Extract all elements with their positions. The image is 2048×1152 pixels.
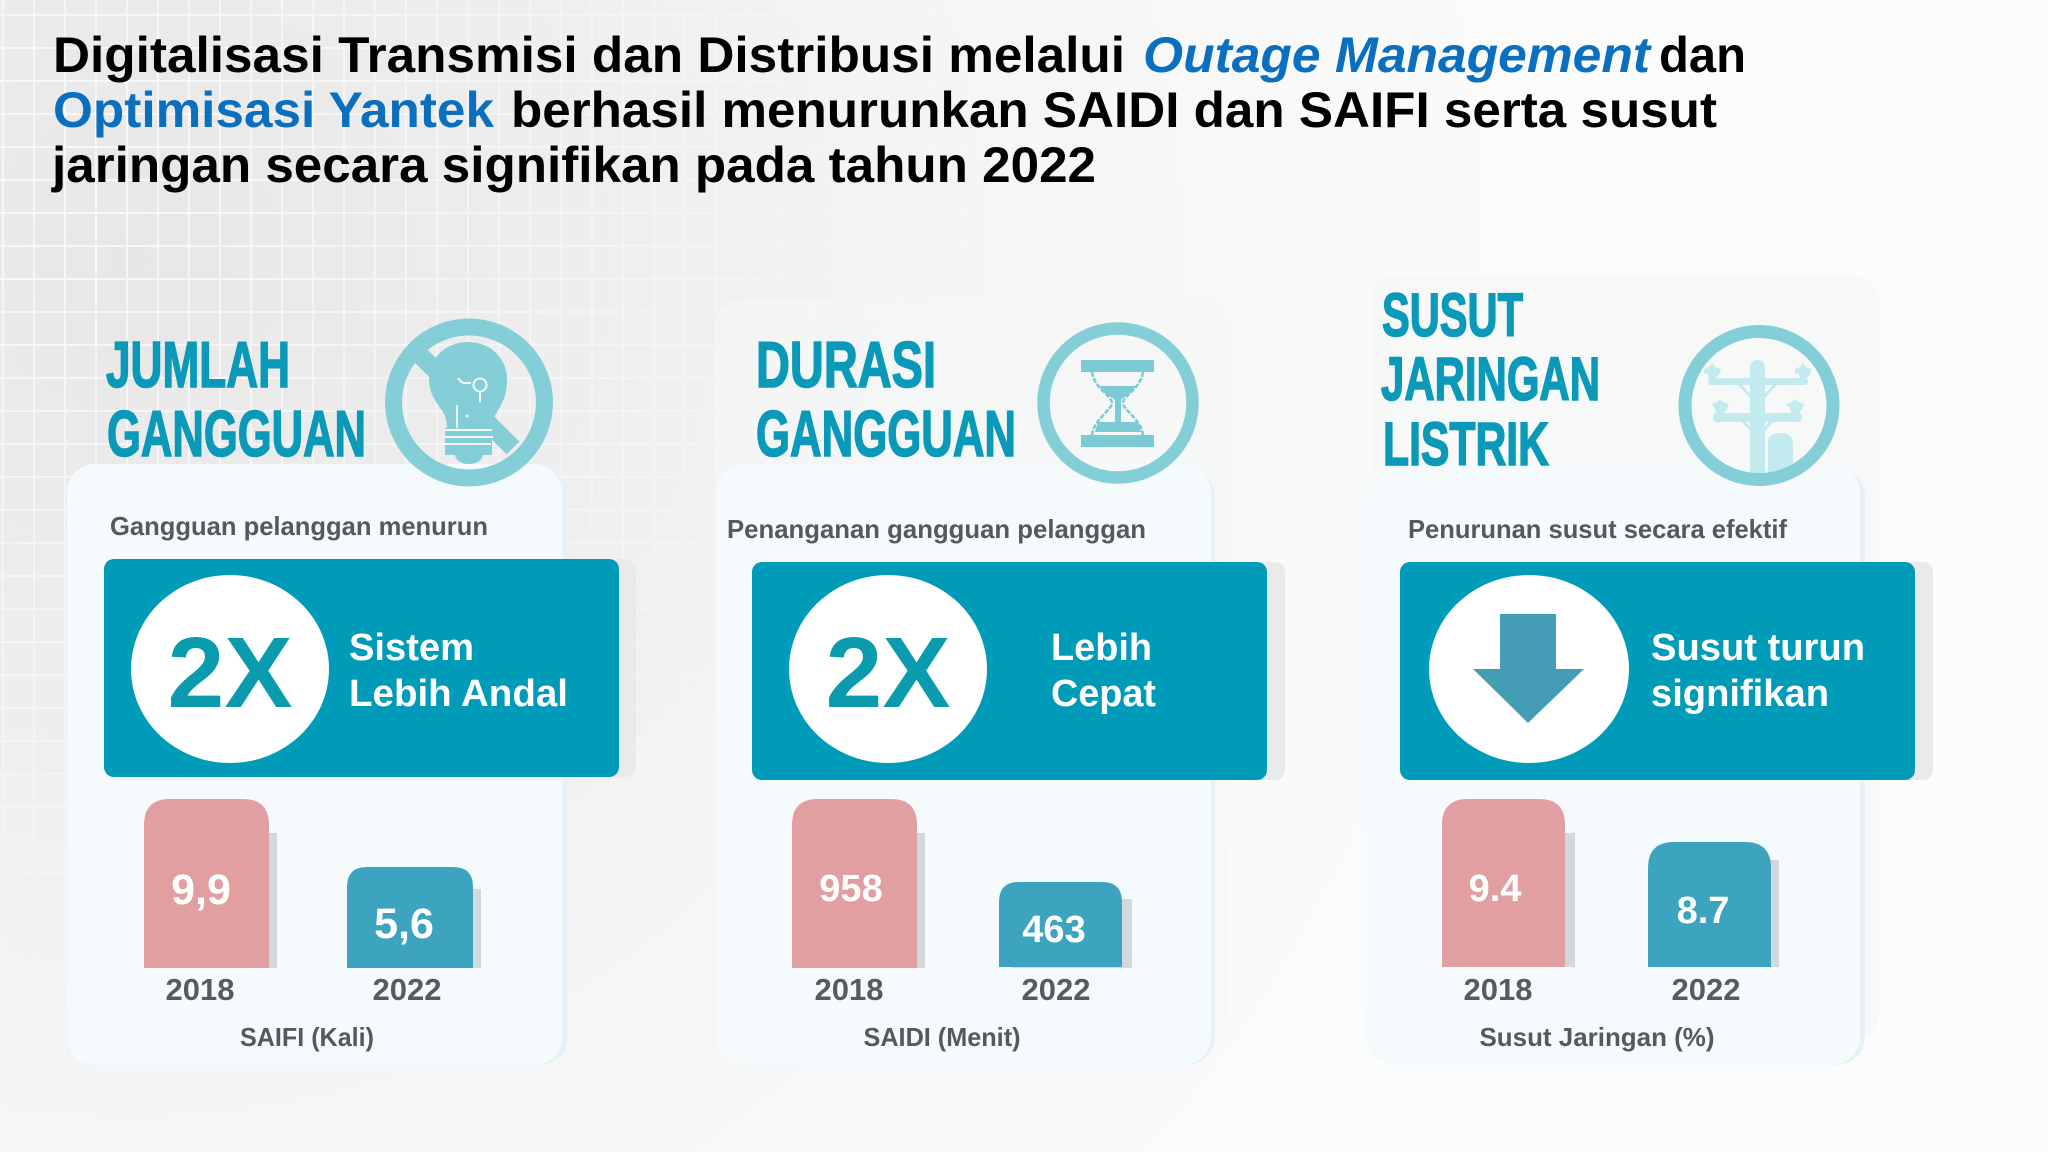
- callout: sistem lebih andal: Sistem: [349, 627, 474, 669]
- bar chart: susut jaringan: 9.4: [1469, 868, 1521, 910]
- bar chart: susut jaringan: Susut Jaringan (%): [1480, 1022, 1714, 1052]
- panel: susut jaringan listrik: [1366, 276, 1933, 1065]
- title: [51, 27, 1746, 193]
- callout: sistem lebih andal: 2X: [168, 617, 292, 729]
- bar chart: SAIDI: [792, 799, 1132, 1052]
- heading: susut jaringan listrik: JARINGAN: [1381, 345, 1600, 413]
- bar chart: SAIFI: SAIFI (Kali): [240, 1022, 374, 1052]
- panel: jumlah gangguan: [67, 327, 636, 1065]
- heading: jumlah gangguan: [106, 328, 366, 470]
- title: berhasil menurunkan SAIDI dan SAIFI serta susut: [511, 82, 1717, 138]
- icon: hourglass: [1044, 328, 1192, 478]
- title: jaringan secara signifikan pada tahun 2022: [51, 137, 1096, 193]
- callout: susut turun signifikan: Susut turun: [1651, 627, 1865, 669]
- bar chart: SAIFI: [144, 799, 481, 1052]
- bar chart: susut jaringan: [1442, 799, 1779, 1052]
- icon: crossed light bulb: [394, 327, 544, 478]
- icon: power pole: [1685, 332, 1833, 480]
- callout: lebih cepat: Lebih: [1051, 627, 1152, 669]
- subtitle: Gangguan pelanggan menurun: [110, 511, 488, 541]
- bar chart: SAIFI: 2022: [373, 972, 441, 1007]
- panel: durasi gangguan: [716, 299, 1285, 1065]
- callout: sistem lebih andal: Lebih Andal: [349, 673, 568, 715]
- bar chart: SAIFI: 2018: [166, 972, 234, 1007]
- icon: down arrow: [1473, 614, 1584, 723]
- title: Digitalisasi Transmisi dan Distribusi melalui: [53, 27, 1125, 83]
- callout: sistem lebih andal: [104, 559, 636, 777]
- bar chart: susut jaringan: 8.7: [1677, 890, 1729, 932]
- heading: durasi gangguan: DURASI: [756, 328, 936, 401]
- heading: durasi gangguan: [756, 328, 1016, 470]
- heading: susut jaringan listrik: [1381, 281, 1600, 478]
- callout: lebih cepat: [752, 562, 1285, 780]
- bar chart: SAIDI: 2022: [1022, 972, 1090, 1007]
- callout: susut turun signifikan: signifikan: [1651, 673, 1829, 715]
- callout: lebih cepat: 2X: [826, 617, 950, 729]
- bar chart: SAIDI: SAIDI (Menit): [864, 1022, 1020, 1052]
- bar chart: SAIDI: 2018: [815, 972, 883, 1007]
- title: Optimisasi Yantek: [53, 82, 494, 138]
- bar chart: SAIDI: 958: [819, 868, 883, 910]
- heading: susut jaringan listrik: SUSUT: [1382, 281, 1523, 349]
- heading: jumlah gangguan: GANGGUAN: [107, 397, 366, 470]
- bar chart: SAIDI: 463: [1022, 909, 1086, 951]
- title: Outage Management: [1143, 27, 1652, 83]
- callout: susut turun signifikan: [1400, 562, 1933, 780]
- callout: lebih cepat: Cepat: [1051, 673, 1156, 715]
- heading: susut jaringan listrik: LISTRIK: [1383, 410, 1549, 478]
- subtitle: Penanganan gangguan pelanggan: [727, 514, 1146, 544]
- bar chart: SAIFI: 9,9: [171, 866, 231, 914]
- bar chart: susut jaringan: 2018: [1464, 972, 1532, 1007]
- heading: jumlah gangguan: JUMLAH: [106, 328, 290, 401]
- heading: durasi gangguan: GANGGUAN: [756, 397, 1016, 470]
- title: dan: [1659, 27, 1746, 83]
- bar chart: SAIFI: 5,6: [374, 900, 434, 948]
- subtitle: Penurunan susut secara efektif: [1408, 514, 1787, 544]
- bar chart: susut jaringan: 2022: [1672, 972, 1740, 1007]
